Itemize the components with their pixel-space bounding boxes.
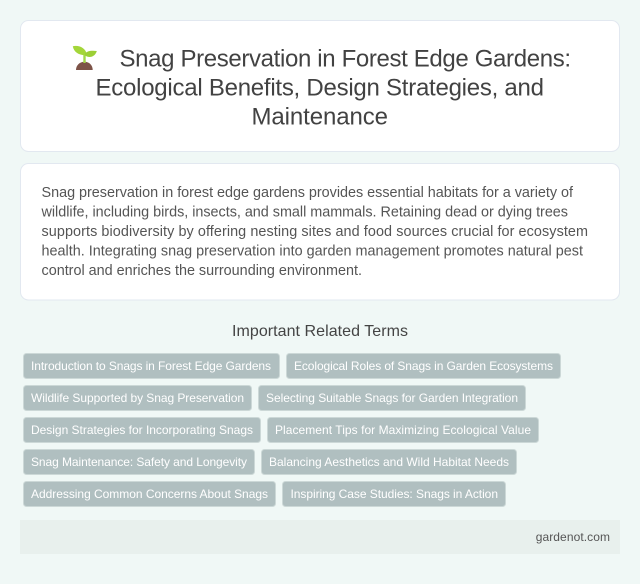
tag: selecting suitable snags: Selecting Suitable Snags for Garden Integration bbox=[266, 391, 518, 405]
tag: snag maintenance bbox=[24, 450, 254, 474]
tag: case studies: Inspiring Case Studies: Snags in Action bbox=[290, 487, 498, 501]
tag: balancing aesthetics bbox=[262, 450, 516, 474]
tag: balancing aesthetics: Balancing Aesthetics and Wild Habitat Needs bbox=[269, 455, 509, 469]
text block: paragraph: wildlife, including birds, insects, and small mammals. Retaining dead or dying trees bbox=[40, 204, 568, 220]
icon: seedling bbox=[73, 46, 97, 70]
title: Ecological Benefits, Design Strategies, and bbox=[96, 74, 544, 102]
text block: paragraph: health. Integrating snag preservation into garden management promotes natural pest bbox=[42, 244, 583, 260]
tag: introduction bbox=[24, 354, 280, 378]
tag: design strategies bbox=[24, 418, 260, 442]
title: Snag Preservation in Forest Edge Gardens: bbox=[120, 46, 571, 72]
panel: introduction paragraph bbox=[20, 164, 620, 300]
tag: placement tips bbox=[268, 418, 538, 442]
tag list bbox=[24, 354, 560, 506]
footer source text: gardenot.com bbox=[536, 530, 610, 544]
tag: common concerns: Addressing Common Concerns About Snags bbox=[31, 487, 268, 501]
tag: ecological roles: Ecological Roles of Snags in Garden Ecosystems bbox=[294, 359, 553, 373]
panel: title header bbox=[20, 20, 620, 152]
tag: snag maintenance: Snag Maintenance: Safety and Longevity bbox=[31, 455, 247, 469]
title bbox=[96, 46, 571, 130]
title: Maintenance bbox=[252, 104, 388, 130]
text block: paragraph: control and enriches the surrounding environment. bbox=[42, 263, 362, 279]
tag: ecological roles bbox=[286, 354, 560, 378]
tag: design strategies: Design Strategies for Incorporating Snags bbox=[31, 423, 253, 437]
text block: paragraph bbox=[40, 185, 588, 279]
text block: paragraph: Snag preservation in forest edge gardens provides essential habitats for a variety of bbox=[42, 185, 574, 201]
footer bbox=[20, 520, 620, 554]
tag: selecting suitable snags bbox=[258, 386, 526, 410]
tag: case studies bbox=[282, 482, 506, 506]
heading: important related terms: Important Related Terms bbox=[232, 323, 408, 340]
tag: placement tips: Placement Tips for Maximizing Ecological Value bbox=[275, 423, 531, 437]
tag: wildlife supported bbox=[24, 386, 252, 410]
tag: common concerns bbox=[24, 482, 276, 506]
text block: paragraph: supports biodiversity by offering nesting sites and food sources crucial for ecosystem bbox=[42, 224, 588, 240]
tag: introduction: Introduction to Snags in Forest Edge Gardens bbox=[31, 359, 271, 373]
tag: wildlife supported: Wildlife Supported by Snag Preservation bbox=[31, 391, 244, 405]
